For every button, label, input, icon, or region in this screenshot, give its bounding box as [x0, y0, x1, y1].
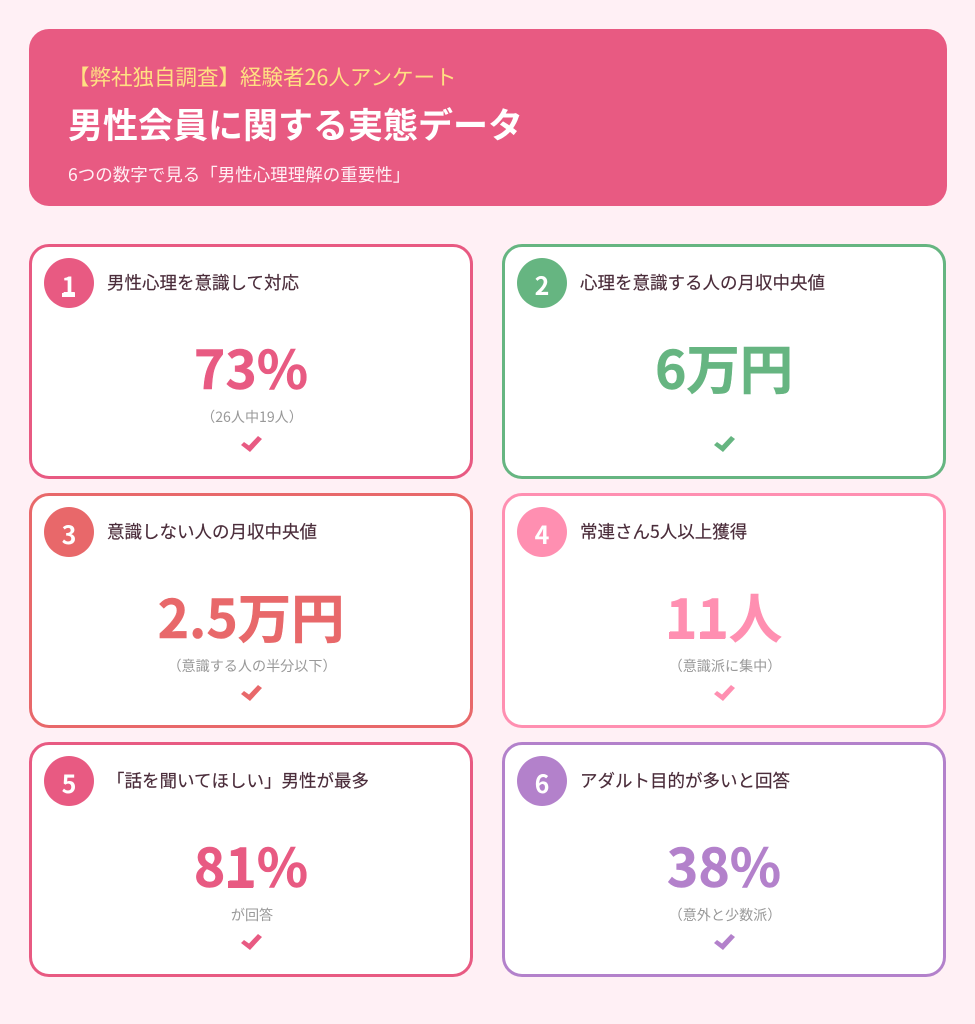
number badge 3 — [44, 507, 94, 557]
panel: card 1 — [29, 244, 473, 479]
stat 81%: 8 % — [194, 826, 308, 902]
card 3 note: （意識する人の半分以下） — [167, 656, 337, 676]
panel: card 5 — [29, 742, 473, 977]
icon: check mark — [714, 934, 735, 950]
icon: check mark — [714, 685, 735, 701]
card 4 title: 常連さん5人以上獲得 — [580, 518, 747, 544]
subheading: 6つの数字で見る「男性心理理解の重要性」 — [68, 162, 410, 187]
icon: check mark — [714, 436, 735, 452]
panel: card 4 — [502, 493, 946, 728]
panel: card 2 — [502, 244, 946, 479]
number badge 1 — [44, 258, 94, 308]
number badge 4: 4 — [535, 516, 549, 552]
icon: check mark — [241, 934, 262, 950]
header banner — [29, 29, 947, 206]
card 5 title: 「話を聞いてほしい」男性が最多 — [107, 768, 369, 792]
number badge 1: 1 — [62, 267, 76, 303]
number badge 6: 6 — [535, 765, 549, 801]
panel: card 6 — [502, 742, 946, 977]
number badge 6 — [517, 756, 567, 806]
icon: check mark — [241, 436, 262, 452]
card 1 note: （26人中19人） — [201, 406, 303, 426]
stat 11人: 人 — [729, 576, 782, 654]
card 2 title: 心理を意識する人の月収中央値 — [580, 270, 825, 294]
card 5 note: が回答 — [231, 904, 273, 924]
card 3 title: 意識しない人の月収中央値 — [107, 518, 317, 544]
stat 2.5万円: 2.5万円 — [158, 576, 344, 654]
panel: card 3 — [29, 493, 473, 728]
stat 38%: 38% — [667, 826, 781, 902]
stat 6万円: 6万円 — [655, 328, 793, 404]
card 6 note: （意外と少数派） — [669, 904, 781, 924]
card 1 title: 男性心理を意識して対応 — [107, 270, 299, 294]
number badge 2: 2 — [535, 267, 549, 303]
card 6 title: アダルト目的が多いと回答 — [580, 768, 790, 792]
stat 73%: 73% — [194, 328, 308, 404]
stat 81%: 1 — [225, 826, 257, 902]
stat 11人: 1 — [666, 576, 697, 654]
number badge 4 — [517, 507, 567, 557]
eyebrow text: 【弊社独自調査】経験者26人アンケート — [68, 61, 457, 92]
number badge 3: 3 — [62, 516, 76, 552]
stat 11人 — [666, 576, 782, 654]
stat 11人: 1 — [697, 576, 729, 654]
main heading: 男性会員に関する実態データ — [68, 98, 523, 149]
number badge 2 — [517, 258, 567, 308]
number badge 5 — [44, 756, 94, 806]
number badge 5: 5 — [62, 765, 76, 801]
card 4 note: （意識派に集中） — [669, 656, 781, 676]
icon: check mark — [241, 685, 262, 701]
